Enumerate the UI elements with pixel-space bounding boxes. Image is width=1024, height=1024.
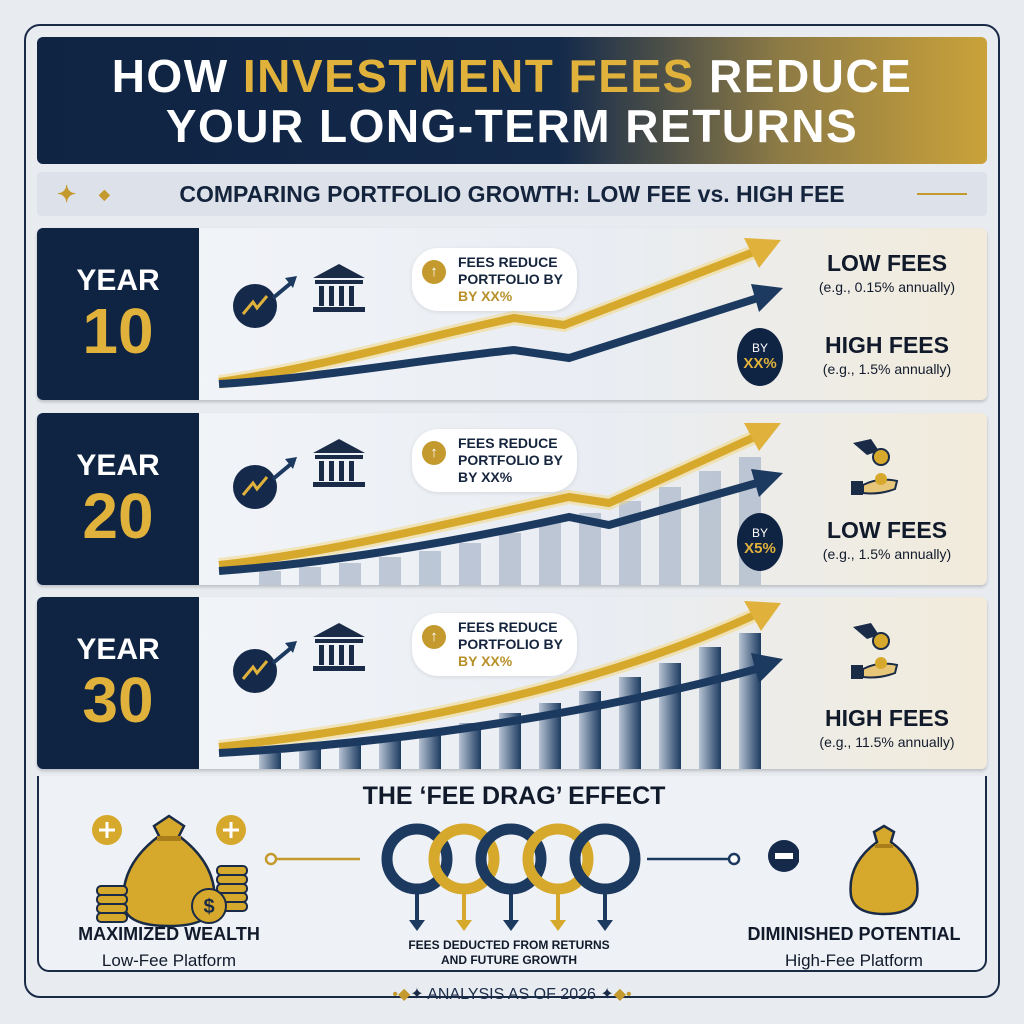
panel: fee drag effect	[37, 776, 987, 972]
labels: LOW FEES	[827, 250, 947, 276]
label	[823, 517, 951, 562]
callout: BY XX%	[458, 469, 512, 485]
year label: 30	[82, 664, 154, 736]
chain of fees	[264, 824, 799, 931]
label: LOW FEES	[827, 517, 947, 543]
callout: BY XX%	[458, 288, 512, 304]
text: fees deducted	[408, 938, 610, 967]
icon: small money bag	[849, 824, 919, 916]
title	[37, 37, 987, 164]
panel: year 20	[37, 413, 987, 585]
label: HIGH FEES	[825, 705, 949, 731]
text: diminished potential: DIMINISHED POTENTIAL	[747, 924, 960, 944]
panel: year 10	[37, 228, 987, 400]
footer: •◆✦ ANALYSIS AS OF 2026 ✦◆•	[392, 986, 632, 1003]
text: diminished potential	[747, 924, 960, 970]
callout: ↑	[430, 628, 438, 645]
callout: PORTFOLIO BY	[458, 452, 563, 468]
panel: year 30	[37, 597, 987, 769]
callout: ↑	[430, 444, 438, 461]
text: fees deducted: FEES DEDUCTED FROM RETURNS	[408, 938, 610, 952]
year label: YEAR	[76, 449, 160, 482]
year label	[37, 413, 199, 585]
callout: FEES REDUCE	[458, 254, 558, 270]
panel: year 10: (e.g., 1.5% annually)	[823, 361, 951, 377]
label: (e.g., 1.5% annually)	[823, 546, 951, 562]
growth chart	[218, 601, 783, 769]
callout	[412, 248, 577, 311]
callout: FEES REDUCE	[458, 619, 558, 635]
panel: year 10: BY	[752, 341, 768, 355]
year label: 20	[82, 480, 154, 552]
panel: year 10: XX%	[743, 355, 777, 372]
year label	[37, 228, 199, 400]
growth chart	[218, 423, 783, 585]
subtitle bar	[37, 172, 987, 216]
year label: YEAR	[76, 633, 160, 666]
label	[819, 705, 955, 750]
text: diminished potential: High-Fee Platform	[785, 951, 923, 970]
panel: year 20: BY	[752, 526, 768, 540]
subtitle bar: ✦	[57, 181, 76, 207]
callout	[412, 429, 577, 492]
heading: THE ‘FEE DRAG’ EFFECT	[363, 782, 665, 810]
icon: money bag with coins: $	[203, 896, 215, 918]
callout: BY XX%	[458, 653, 512, 669]
subtitle bar: ◆	[99, 186, 110, 202]
callout: PORTFOLIO BY	[458, 271, 563, 287]
text: fees deducted: AND FUTURE GROWTH	[441, 953, 577, 967]
title: HOW INVESTMENT FEES REDUCE	[112, 50, 912, 102]
text: maximized wealth	[78, 924, 260, 970]
icon: money bag with coins	[92, 814, 248, 928]
callout: PORTFOLIO BY	[458, 636, 563, 652]
growth chart	[218, 238, 783, 389]
text: maximized wealth: MAXIMIZED WEALTH	[78, 924, 260, 944]
label: (e.g., 11.5% annually)	[819, 734, 955, 750]
title: YOUR LONG-TERM RETURNS	[166, 100, 858, 152]
year label	[37, 597, 199, 769]
icon: hand with coin	[851, 439, 898, 495]
labels: (e.g., 0.15% annually)	[819, 279, 955, 295]
icon: hand with coin	[851, 623, 898, 679]
year label: 10	[82, 295, 154, 367]
panel: year 20: X5%	[744, 540, 776, 557]
callout	[412, 613, 577, 676]
labels	[819, 250, 955, 295]
callout: ↑	[430, 263, 438, 280]
callout: FEES REDUCE	[458, 435, 558, 451]
text: maximized wealth: Low-Fee Platform	[102, 951, 236, 970]
subtitle bar: COMPARING PORTFOLIO GROWTH: LOW FEE vs. HIGH FEE	[179, 181, 845, 207]
year label: YEAR	[76, 264, 160, 297]
panel: year 10: HIGH FEES	[825, 332, 949, 358]
